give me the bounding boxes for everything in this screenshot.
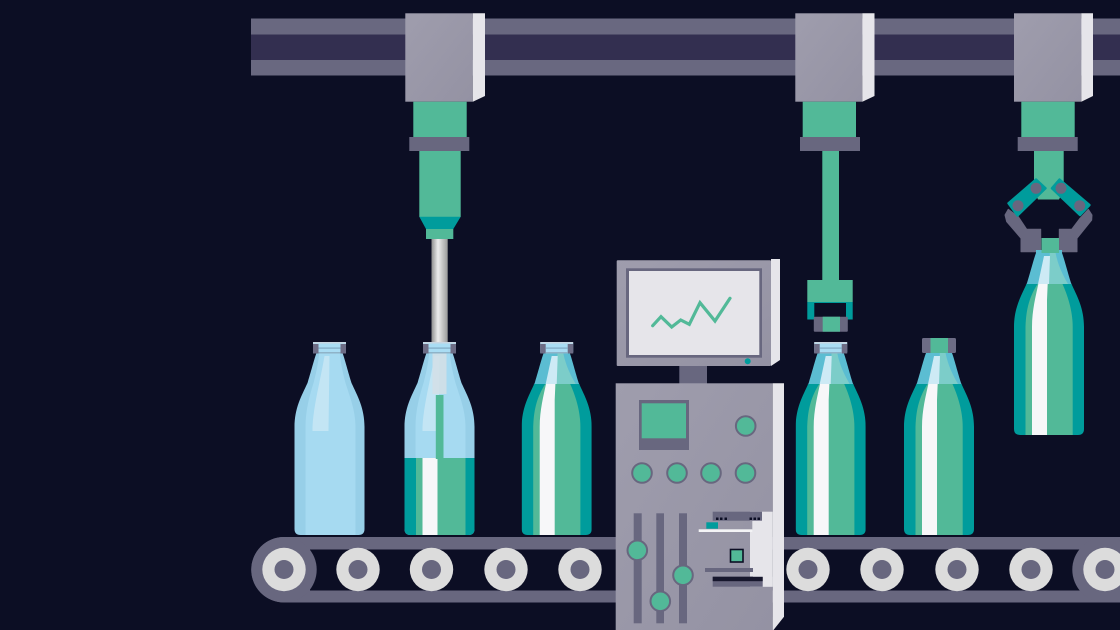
- bottle 5: capped: [899, 338, 979, 536]
- arm body: [803, 102, 856, 138]
- right end roller housing: [1072, 537, 1120, 602]
- pipe inside bottle: [432, 344, 446, 394]
- power light: [745, 358, 751, 364]
- held cap: [814, 317, 848, 332]
- monitor side: [771, 259, 780, 366]
- mount block: [405, 13, 485, 102]
- bottle 2: filling: [404, 342, 474, 535]
- monitor stand: [679, 364, 707, 384]
- filling pipe: [432, 239, 448, 344]
- belt frame: [251, 537, 1120, 602]
- cabinet side: [773, 383, 784, 630]
- capping arm: [795, 13, 874, 332]
- collar: [800, 137, 860, 151]
- slider knobs: [628, 540, 693, 611]
- rollers: [262, 548, 1120, 591]
- rod: [822, 151, 839, 281]
- left end roller housing: [251, 537, 317, 602]
- gripper arm: [1005, 13, 1093, 252]
- liquid stream: [436, 395, 444, 459]
- stem: [1034, 151, 1064, 200]
- arm body: [1021, 102, 1075, 138]
- illustration: bottling production line: [251, 13, 1120, 630]
- mount block: [1014, 13, 1093, 102]
- liquid level: [404, 458, 474, 535]
- left link: [1008, 180, 1046, 216]
- arm body: [413, 102, 467, 138]
- monitor casing: [617, 260, 771, 366]
- display: [639, 400, 689, 450]
- open compartment: [699, 512, 773, 587]
- head: [807, 280, 853, 302]
- collar: [1018, 137, 1078, 151]
- line chart: [653, 298, 730, 327]
- head jaws: [807, 302, 853, 320]
- right claw: [1059, 209, 1092, 252]
- overhead rail: [251, 18, 1120, 76]
- buttons: [632, 416, 756, 483]
- slider tracks: [634, 513, 687, 623]
- bottle 4: full under capper: [791, 342, 871, 536]
- cabinet front: [616, 383, 773, 630]
- control cabinet: [616, 383, 784, 630]
- conveyor belt: [251, 537, 1120, 602]
- right link: [1052, 180, 1090, 215]
- monitor: [617, 259, 780, 366]
- bottle 1: empty: [294, 342, 366, 536]
- nozzle: [419, 217, 461, 229]
- bottle 6: lifted by gripper: [1009, 238, 1089, 436]
- left claw: [1005, 209, 1041, 252]
- bottle 3: full: [517, 342, 597, 536]
- screen: [629, 271, 759, 355]
- collar: [409, 137, 469, 151]
- lower cylinder: [419, 151, 461, 217]
- screen bezel: [626, 268, 762, 358]
- filling arm: [405, 13, 485, 344]
- mount block: [795, 13, 874, 102]
- nozzle tip: [426, 229, 453, 239]
